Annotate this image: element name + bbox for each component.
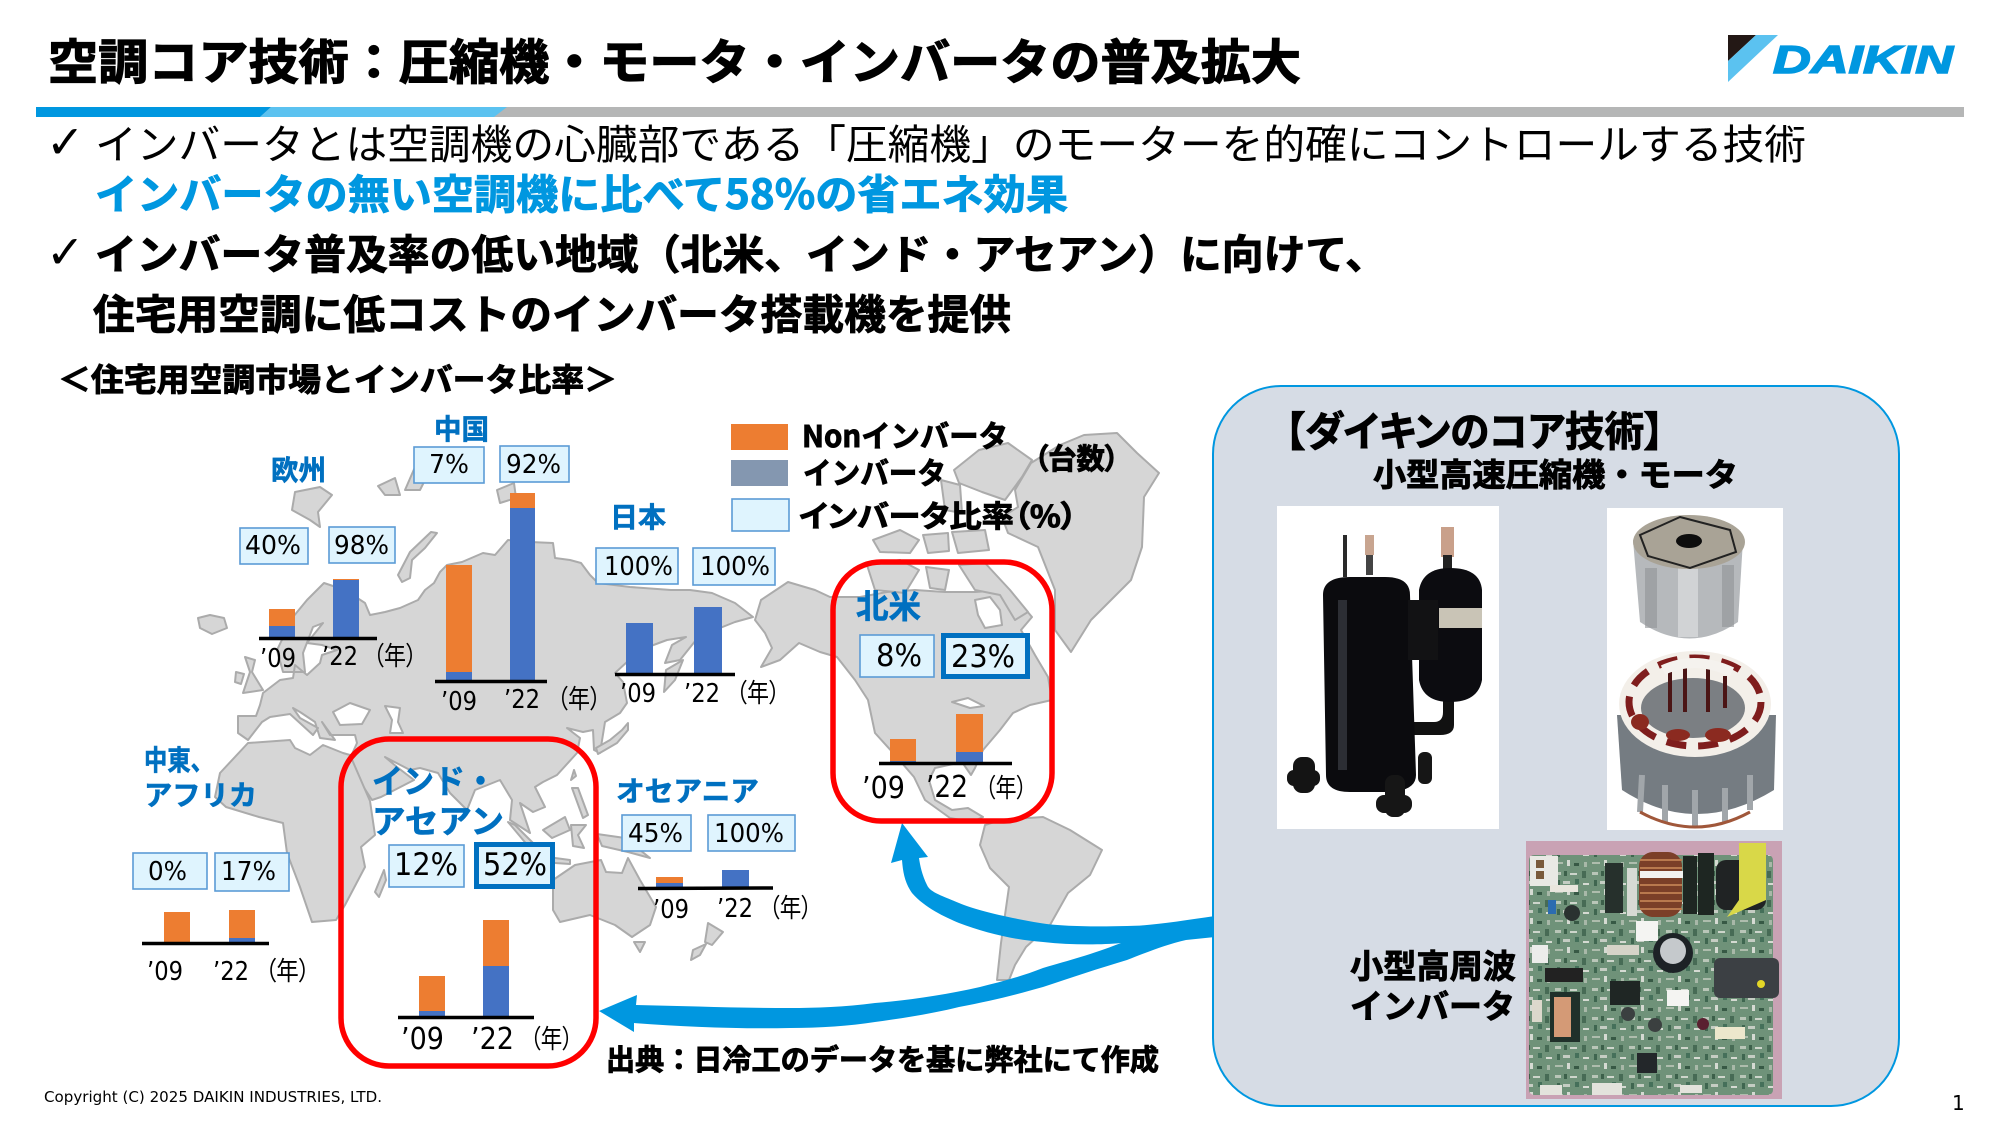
region: Europe [240,449,417,674]
region: Middle East and Africa: 中東、 [144,739,214,779]
region: Japan: ’22 [684,679,720,709]
region: North America (highlighted): 8% [876,638,922,674]
region: China: 7% [429,450,469,480]
legend: non-inverter: Nonインバータ [802,412,1008,456]
region: Europe: ’22 [322,642,358,672]
region: India and ASEAN (highlighted): 12% [394,847,458,883]
Iceland [198,615,227,634]
region: Japan: 100% [604,552,673,582]
panel label: inverter [1350,940,1516,1028]
bullet 2 line 1: インバータ普及率の低い地域（北米、インド・アセアン）に向けて、 [95,221,1387,281]
region: Europe: 40% [245,531,301,561]
logo: DAIKIN: DAIKIN [1773,39,1954,82]
region: Europe: 98% [334,531,389,561]
Africa [215,740,375,922]
page number: 1 [1952,1091,1965,1115]
region: North America (highlighted): ’09 [862,771,905,806]
region: Japan [596,496,780,710]
region: China: ’09 [441,687,477,717]
region: North America (highlighted): 23% [951,639,1015,675]
Taiwan [571,770,576,780]
region: India and ASEAN (highlighted): ’09 [401,1022,444,1057]
Svalbard [292,487,332,527]
inland seas [333,597,1002,733]
region: Middle East and Africa: 0% [148,857,187,887]
region: Oceania: ’09 [653,895,689,925]
region: Middle East and Africa: （年） [265,951,310,988]
panel label: inverter: インバータ [1350,980,1515,1028]
New Zealand [691,923,723,960]
section heading: ＜住宅用空調市場とインバータ比率＞ [58,355,617,401]
region: Middle East and Africa [133,739,310,988]
legend: ratio: インバータ比率（%） [799,492,1077,536]
copyright: Copyright (C) 2025 DAIKIN INDUSTRIES, LTD. [44,1088,382,1106]
region: Europe: ’09 [260,644,296,674]
Sakhalin [664,660,683,692]
Eurasia [238,540,753,833]
region: North America (highlighted): 北米 [856,580,921,628]
Madagascar [375,870,386,897]
region: China: （年） [557,679,601,716]
region: Middle East and Africa: ’09 [147,957,183,987]
region: Japan: 日本 [610,496,666,536]
region: Oceania: 45% [628,819,683,849]
world map [198,433,1159,980]
UK and Ireland [235,657,263,693]
region: India and ASEAN (highlighted): （年） [530,1019,573,1056]
region: North America (highlighted): （年） [985,768,1027,805]
region: Oceania [616,770,812,925]
region: Oceania: （年） [769,888,812,925]
region: India and ASEAN (highlighted): ’22 [471,1022,514,1057]
region: Middle East and Africa: 17% [221,857,276,887]
bullet text block [46,111,1806,341]
source note: 出典：日冷工のデータを基に弊社にて作成 [606,1037,1159,1079]
region: Japan: ’09 [620,679,656,709]
legend: inverter: インバータ [803,449,946,493]
region: Oceania: ’22 [717,894,753,924]
Severnaya Zemlya [497,483,516,503]
North America [755,582,1052,822]
panel subheading: 小型高速圧縮機・モータ [1373,450,1738,496]
region: Japan: （年） [736,673,780,710]
Canadian Arctic [867,443,1032,620]
region: India and ASEAN (highlighted): アセアン [372,795,504,843]
panel: core technology [1213,386,1906,1110]
Japan [596,723,628,754]
region: Middle East and Africa: アフリカ [144,774,257,814]
Tasmania [634,942,645,952]
Greenland [1002,433,1159,652]
photo: inverter board [1526,841,1782,1099]
region: Oceania: オセアニア [616,770,759,810]
region: China: 92% [506,450,561,480]
region: India and ASEAN (highlighted): 52% [483,847,547,883]
arrows to target regions [599,823,1215,1032]
panel label: inverter: 小型高周波 [1350,940,1516,988]
logo: DAIKIN [1728,35,1954,82]
bullet 1 check: ✓ [46,115,85,169]
title: 空調コア技術：圧縮機・モータ・インバータの普及拡大 [48,23,1301,93]
region: Japan: 100% [700,552,770,582]
legend [731,412,1119,536]
bullet 2 line 2: 住宅用空調に低コストのインバータ搭載機を提供 [93,281,1011,341]
bullet 2 check: ✓ [46,225,85,279]
photo: motor [1607,508,1783,830]
region: China: ’22 [504,685,540,715]
Franz Josef [378,467,430,495]
header rule [36,107,1964,117]
region: Europe: （年） [373,636,417,673]
photo: compressor [1277,506,1503,831]
region: China [414,408,601,717]
region: Europe: 欧州 [271,449,326,489]
bullet 1 line: インバータとは空調機の心臓部である「圧縮機」のモーターを的確にコントロールする技術 [95,111,1806,171]
region: Oceania: 100% [714,819,784,849]
Novaya Zemlya [398,532,437,582]
legend: unit count: （台数） [1034,436,1119,478]
region: North America (highlighted) [833,562,1052,821]
bullet 1 highlight: インバータの無い空調機に比べて58%の省エネ効果 [95,161,1068,221]
region: India and ASEAN (highlighted): インド・ [372,755,496,803]
South America [980,817,1102,980]
Australia [553,858,656,937]
panel heading: 【ダイキンのコア技術】 [1285,398,1664,458]
region: Middle East and Africa: ’22 [213,957,249,987]
region: China: 中国 [434,408,489,448]
SE Asia islands [508,788,650,864]
region: North America (highlighted): ’22 [926,770,968,805]
legend: inverter [731,449,946,493]
region: India and ASEAN (highlighted) [341,739,596,1066]
